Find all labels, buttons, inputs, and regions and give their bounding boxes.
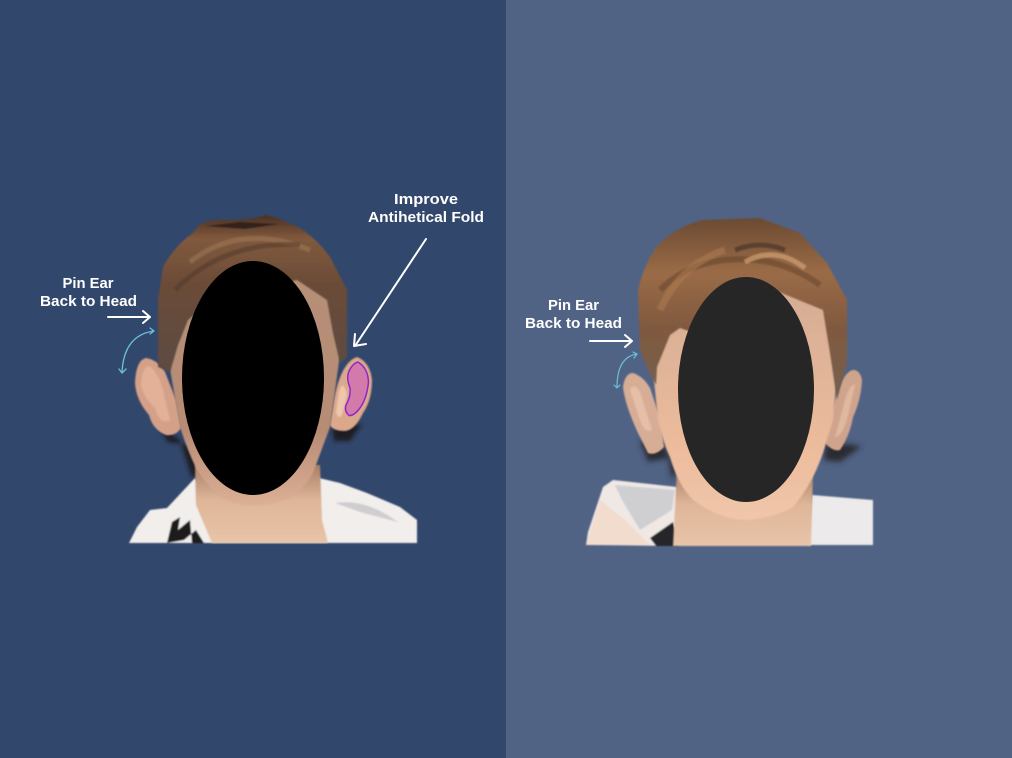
panel: after background: [506, 0, 1012, 758]
label: pin ear back to head, before: Pin Ear: [62, 275, 114, 292]
left ear: before: [135, 358, 181, 435]
left ear: after: [623, 373, 664, 454]
label: improve antihetical fold: [368, 191, 484, 226]
neck: before: [195, 465, 328, 543]
label: pin ear back to head, before: Back to Head: [40, 293, 137, 310]
label: improve antihetical fold: Antihetical Fold: [368, 209, 484, 226]
right ear: before: [330, 357, 372, 431]
right ear: after: [825, 370, 862, 450]
hair: after: [638, 218, 847, 400]
panel: before background: [0, 0, 506, 758]
face mask oval: after: [678, 277, 814, 502]
antihelical fold highlight: [345, 362, 368, 416]
arrow: pin ear, after: [590, 335, 632, 347]
curved arrow: ear motion, after: [614, 352, 637, 388]
arrow: antihelical fold: [354, 239, 426, 346]
photo: after portrait: [586, 218, 873, 546]
shirt: before: [129, 477, 417, 543]
shirt: after: [586, 480, 873, 546]
label: pin ear back to head, after: Back to Head: [525, 315, 622, 332]
hair: before: [158, 215, 347, 372]
label: pin ear back to head, after: Pin Ear: [548, 297, 599, 314]
face mask oval: before: [182, 261, 324, 495]
curved arrow: ear motion, before: [119, 328, 154, 373]
neck: after: [673, 470, 813, 546]
label: pin ear back to head, after: [525, 297, 622, 332]
arrow: pin ear, before: [108, 311, 150, 323]
face: before: [165, 260, 342, 506]
photo: before portrait: [129, 215, 417, 543]
face: after: [650, 270, 840, 520]
label: pin ear back to head, before: [40, 275, 137, 310]
label: improve antihetical fold: Improve: [394, 191, 458, 208]
